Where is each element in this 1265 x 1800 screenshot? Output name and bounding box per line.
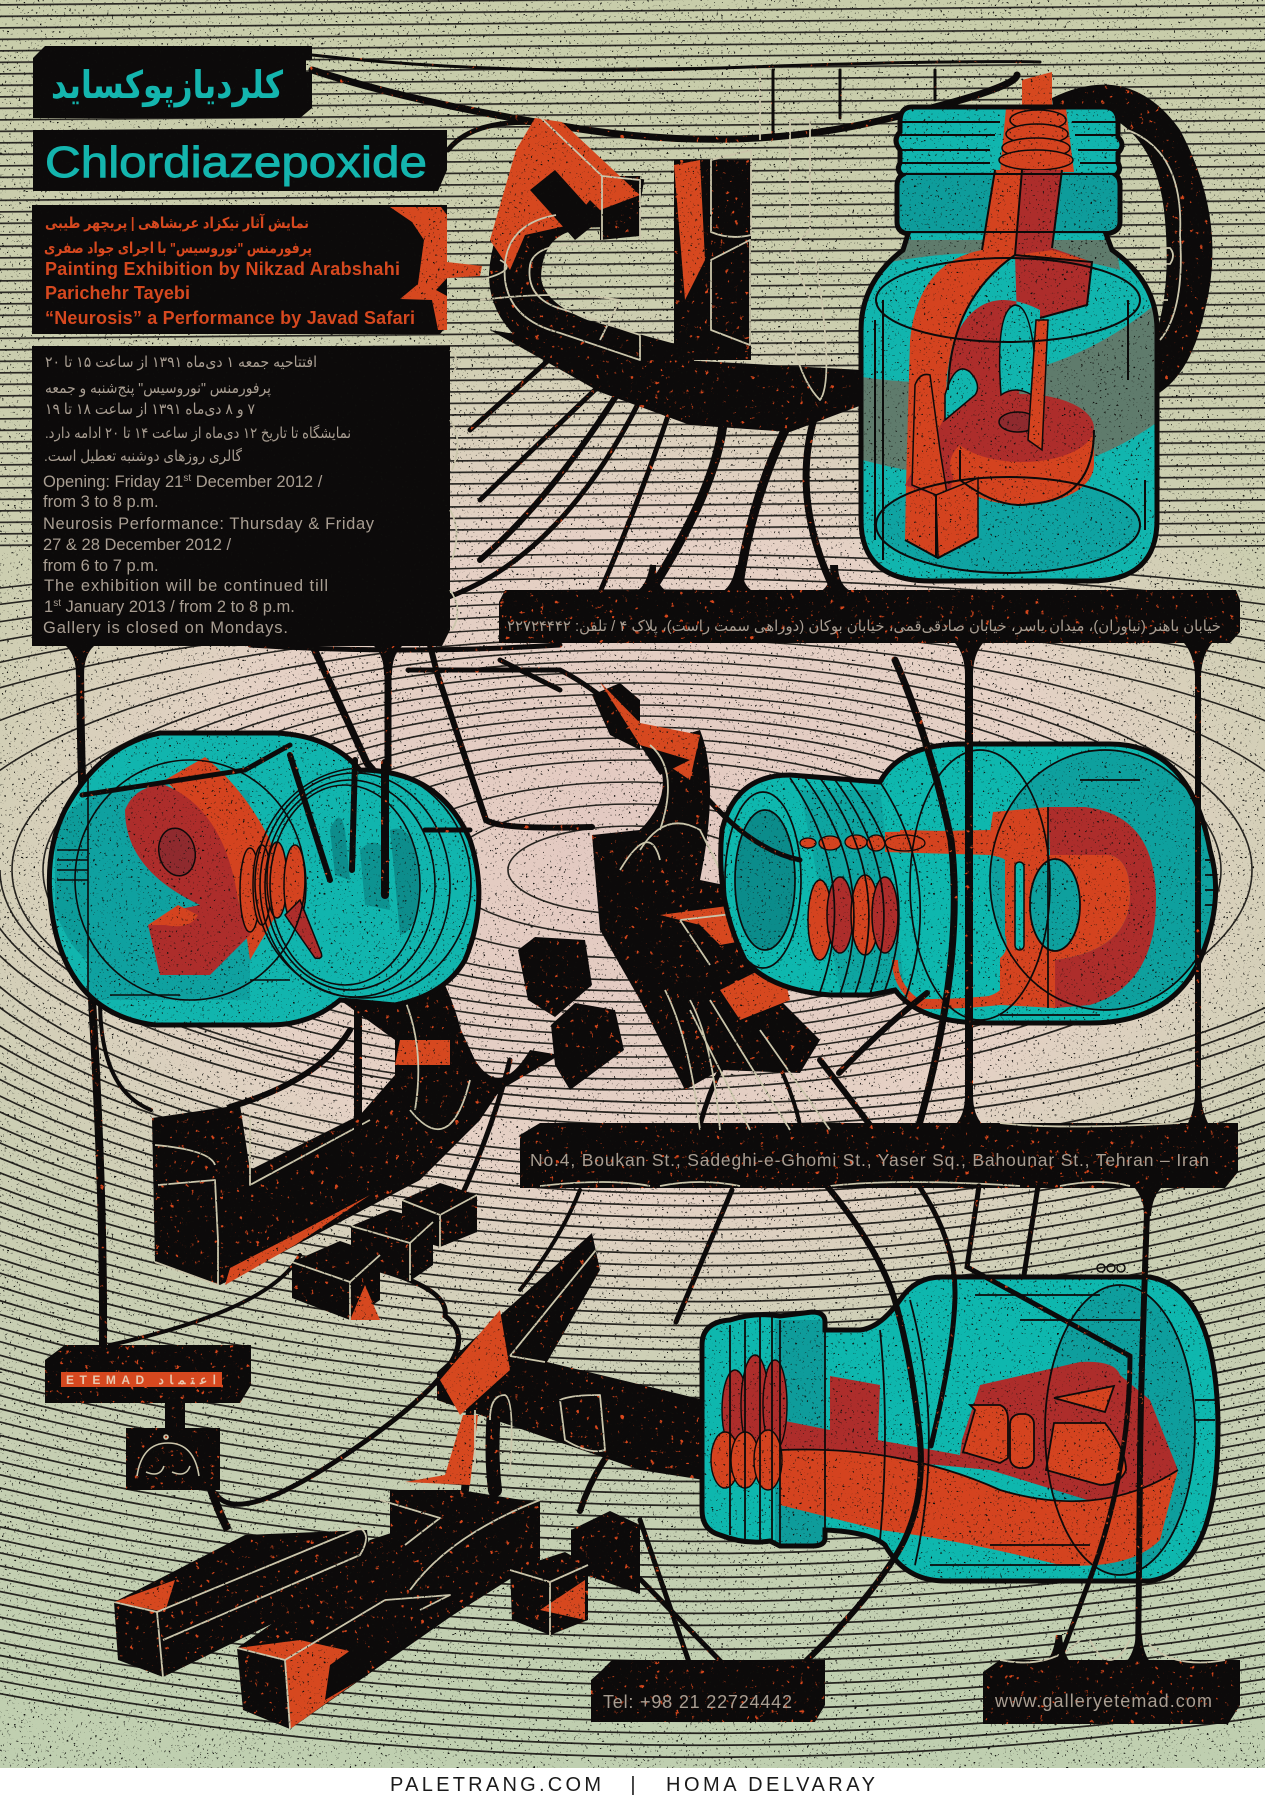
footer credit: | (630, 1774, 636, 1796)
dates and opening hours: Neurosis Performance: Thursday & Friday (43, 515, 375, 533)
small chain mark above bottom jar (1097, 1264, 1125, 1272)
fork arms (114, 1490, 640, 1729)
dates and opening hours: st (183, 473, 191, 484)
jar line details (875, 122, 1145, 573)
exhibition credits: “Neurosis” a Performance by Javad Safari (45, 308, 415, 328)
centre cubes (518, 683, 640, 1090)
strands over the jars (82, 640, 1198, 1664)
small cubes lower-left (292, 1183, 477, 1320)
dates and opening hours (43, 354, 375, 637)
text panels backing (32, 46, 450, 646)
left jar (49, 733, 479, 1025)
bottom jar (702, 1277, 1218, 1581)
letter in jar: orange crescent (165, 757, 285, 960)
melting letter in jar (1000, 108, 1074, 172)
jar rings (57, 760, 471, 1000)
strands from text panel to middle (80, 640, 650, 1345)
Sasa logo (137, 1435, 199, 1476)
jar rings (725, 750, 1225, 1020)
right jar (721, 744, 1225, 1023)
beads on neck (800, 835, 925, 851)
title: Persian: کلردیازپوکساید (51, 65, 284, 107)
jar line details (730, 1285, 1215, 1575)
footer credit: PALETRANG.COM (390, 1774, 601, 1796)
centre letter (592, 730, 820, 1090)
neck scallops (711, 1355, 787, 1490)
strand flares at bars (66, 565, 1212, 1664)
logo boxes (45, 1345, 251, 1530)
red band of D (1048, 807, 1156, 1008)
address: Persian: خیابان باهنر (نیاوران)، میدان یاسر، خیابان صادقی‌قمی، خیابان بوکان (دوراهی سمت راست)، پلاک ۴ / تلفن: ۲۲۷۲۴۴۴۲ (507, 618, 1221, 636)
diagonal letter and bar to bottom jar (437, 1233, 704, 1480)
dates and opening hours: Gallery is closed on Mondays. (43, 619, 288, 637)
background concentric lines: middle (0, 553, 1265, 1758)
address bar: Persian (499, 590, 1240, 643)
exhibition credits: پرفورمنس "نوروسیس" با اجرای جواد صفری (44, 240, 312, 258)
dates and opening hours: from 3 to 8 p.m. (43, 493, 159, 511)
dates and opening hours: 1 (44, 598, 53, 616)
jar interior shading (990, 750, 1220, 1010)
lower teeth (808, 875, 898, 960)
dates and opening hours: افتتاحیه جمعه ۱ دی‌ماه ۱۳۹۱ از ساعت ۱۵ تا ۲۰ (45, 354, 317, 371)
dates and opening hours: پرفورمنس "نوروسیس" پنج‌شنبه و جمعه (45, 380, 271, 398)
dates and opening hours: from 6 to 7 p.m. (43, 557, 159, 575)
jar outline (702, 1277, 1218, 1581)
jar interior shading (1045, 1285, 1195, 1575)
splash texture: break-up of orange (325, 170, 800, 1700)
address: English: No.4, Boukan St., Sadeghi-e-Ghomi St., Yaser Sq., Bahounar St., Tehran – Iran (530, 1150, 1209, 1170)
dates and opening hours: The exhibition will be continued till (44, 577, 328, 595)
drips under top jar (312, 55, 1040, 600)
exhibition credits: Painting Exhibition by Nikzad Arabshahi (45, 259, 400, 279)
letter: lower-left L (152, 1106, 480, 1285)
address bar: English (520, 1123, 1238, 1188)
orange splashes on black forms (114, 72, 1052, 1729)
orange body of D (900, 807, 1130, 1008)
dates and opening hours: st (53, 598, 61, 609)
footer credit: HOMA DELVARAY (666, 1774, 875, 1796)
dates and opening hours: 27 & 28 December 2012 / (43, 536, 231, 554)
top jar (855, 107, 1160, 581)
dates and opening hours: January 2013 / from 2 to 8 p.m. (61, 598, 295, 616)
left jar stem mass (344, 986, 554, 1131)
grey band through jar (855, 300, 1160, 477)
orange windows (963, 1386, 1126, 1485)
footer credit (390, 1774, 875, 1796)
dates and opening hours: December 2012 / (191, 473, 323, 491)
exhibition credits: Parichehr Tayebi (45, 283, 190, 303)
exhibition credits (44, 214, 415, 328)
telephone: Tel: +98 21 22724442 (603, 1692, 792, 1712)
letter: top centre ring and block (490, 85, 1212, 432)
dates and opening hours: ۷ و ۸ دی‌ماه ۱۳۹۱ از ساعت ۱۸ تا ۱۹ (45, 401, 255, 418)
red letter (780, 1362, 1178, 1510)
neck scallops (240, 842, 306, 932)
background stripes: top (0, 0, 1265, 548)
dates and opening hours: گالری روزهای دوشنبه تعطیل است. (44, 447, 243, 465)
jar outline (721, 744, 1216, 1023)
title: English: Chlordiazepoxide (45, 138, 427, 187)
jar base and neck shading (890, 172, 1130, 234)
dates and opening hours: نمایشگاه تا تاریخ ۱۲ دی‌ماه از ساعت ۱۴ تا ۲۰ ادامه دارد. (45, 424, 351, 442)
drips to fork (108, 1057, 872, 1660)
Etemad gallery logo: ETEMAD اعتماد (66, 1373, 216, 1387)
jar outline (49, 733, 479, 1025)
website: www.galleryetemad.com (994, 1691, 1212, 1711)
contact boxes (591, 1660, 1240, 1724)
jar interior shading (88, 790, 250, 1000)
jar outline (861, 107, 1157, 581)
exhibition credits: نمایش آثار نیکزاد عربشاهی | پریچهر طیبی (45, 214, 309, 233)
dates and opening hours: Opening: Friday 21 (43, 473, 183, 491)
